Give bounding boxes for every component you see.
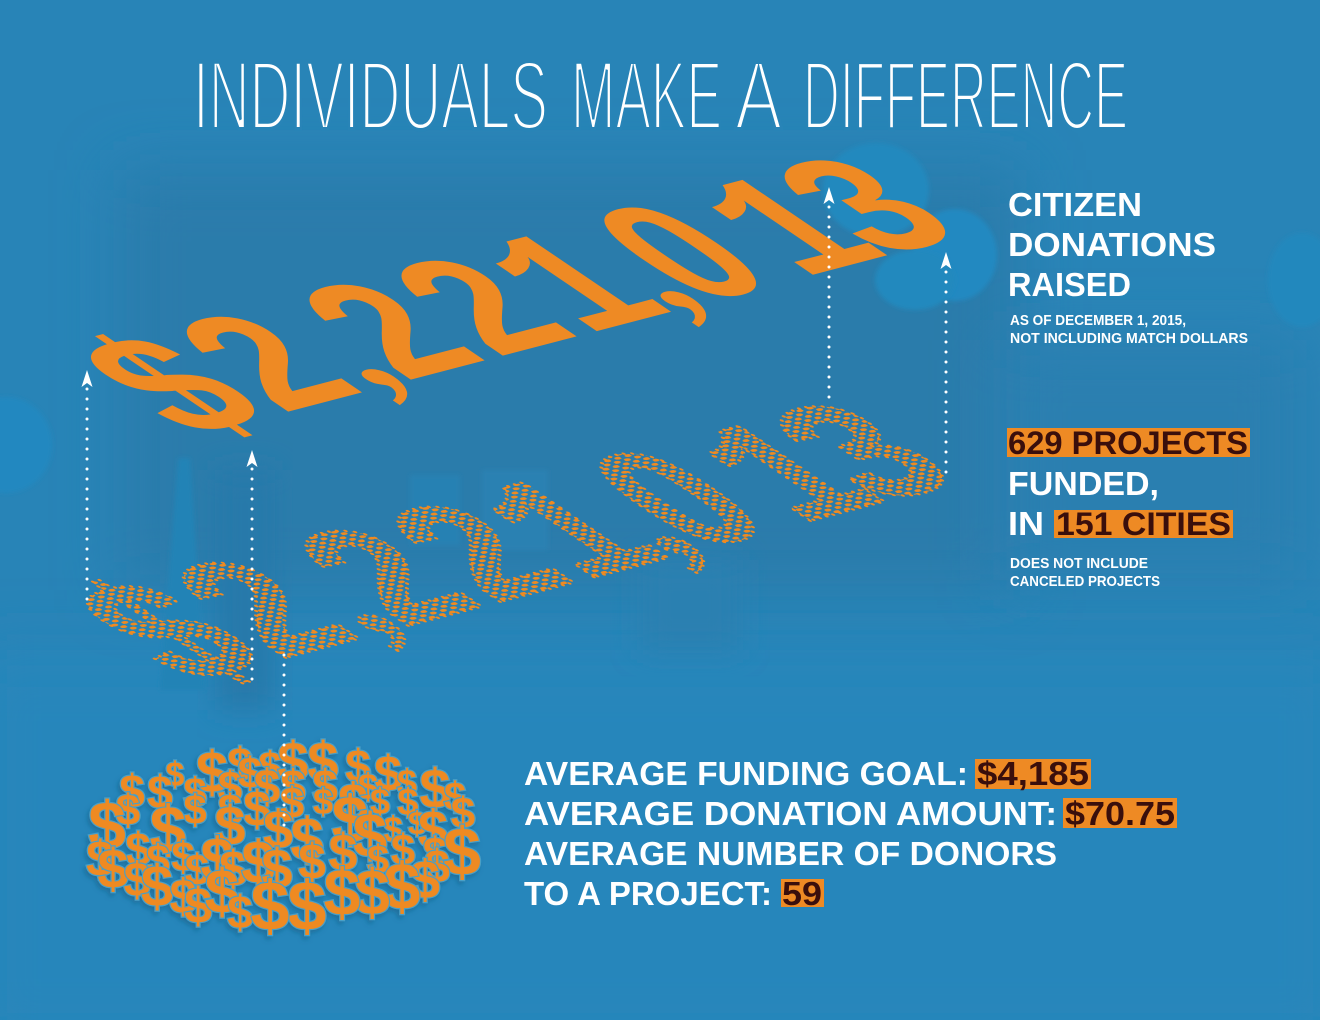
pile of dollar signs: $ <box>170 871 197 924</box>
pile of dollar signs: $ <box>443 814 481 890</box>
text block: averages: TO A PROJECT: <box>524 875 772 912</box>
text block: averages: AVERAGE NUMBER OF DONORS <box>524 835 1057 872</box>
pile of dollar signs: $ <box>183 786 207 833</box>
pile of dollar signs: $ <box>312 760 338 812</box>
pile of dollar signs: $ <box>116 786 140 835</box>
dotted amount: $2,221,013 made of small marks: $2 <box>32 533 423 721</box>
pile of dollar signs: $ <box>358 766 378 807</box>
pile of dollar signs: $ <box>338 773 368 833</box>
pile of dollar signs: $ <box>290 806 324 873</box>
pile of dollar signs: $ <box>258 743 282 790</box>
pile of dollar signs: $ <box>218 763 242 812</box>
pile of dollar signs: $ <box>423 829 447 878</box>
text block: averages: $4,185 <box>977 755 1089 792</box>
text block: averages: AVERAGE DONATION AMOUNT: <box>524 795 1057 832</box>
pile of dollar signs: $ <box>444 775 466 819</box>
pile of dollar signs: $ <box>243 781 271 837</box>
text block: averages: AVERAGE FUNDING GOAL: <box>524 755 968 792</box>
large amount: $2,221,013: , <box>236 287 441 412</box>
text block: citizen donations raised: AS OF DECEMBER 1, 2015, <box>1010 313 1186 329</box>
large amount: $2,221,013: , <box>535 209 740 334</box>
pile of dollar signs: $ <box>332 782 368 856</box>
pile of dollar signs: $ <box>227 738 253 790</box>
pile of dollar signs: $ <box>307 730 339 793</box>
pile of dollar signs: $ <box>397 782 419 824</box>
pile of dollar signs: $ <box>119 765 145 817</box>
title: A <box>735 41 782 150</box>
pile of dollar signs: $ <box>238 749 262 798</box>
pile of dollar signs: $ <box>125 823 151 875</box>
text block: projects funded: IN <box>1008 505 1044 542</box>
text block: citizen donations raised: RAISED <box>1008 266 1131 303</box>
pile of dollar signs: $ <box>353 802 387 871</box>
large amount: $2,221,013: 221 <box>249 207 733 419</box>
pile of dollar signs: $ <box>451 789 475 838</box>
title <box>193 41 1128 150</box>
pile of dollar signs: $ <box>254 761 281 814</box>
pile of dollar signs: $ <box>214 794 246 857</box>
pile of dollar signs: $ <box>345 740 371 792</box>
pile of dollar signs: $ <box>419 757 451 820</box>
pile of dollar signs: $ <box>184 878 212 934</box>
text block: citizen donations raised: NOT INCLUDING MATCH DOLLARS <box>1010 331 1248 347</box>
text block: citizen donations raised: DONATIONS <box>1008 226 1216 263</box>
pile of dollar signs: $ <box>200 826 234 893</box>
pile of dollar signs: $ <box>141 854 173 919</box>
pile of dollar signs: $ <box>418 800 448 860</box>
dotted amount: $2,221,013 made of small marks: 13 <box>646 376 1023 561</box>
pile of dollar signs: $ <box>124 854 151 907</box>
pile of dollar signs: $ <box>171 833 195 880</box>
large amount: $2,221,013 <box>26 125 1026 475</box>
pile of dollar signs: $ <box>277 730 309 793</box>
arrow: left edge of the dollar sign <box>82 370 92 600</box>
pile of dollar signs: $ <box>298 834 326 890</box>
dotted amount: $2,221,013 made of small marks <box>23 371 1023 721</box>
pile of dollar signs: $ <box>241 829 275 896</box>
pile of dollar signs: $ <box>397 762 417 803</box>
pile of dollar signs: $ <box>196 740 228 805</box>
pile of dollar signs: $ <box>391 826 415 875</box>
pile of dollar signs: $ <box>280 760 306 812</box>
pile of dollar signs: $ <box>251 867 289 945</box>
pile of dollar signs <box>86 730 481 945</box>
text block: projects funded: DOES NOT INCLUDE <box>1010 556 1148 572</box>
pile of dollar signs: $ <box>185 846 209 895</box>
pile of dollar signs: $ <box>146 836 170 883</box>
text block: projects funded: CANCELED PROJECTS <box>1010 574 1160 590</box>
pile of dollar signs: $ <box>384 849 420 923</box>
title: MAKE <box>571 41 722 150</box>
pile of dollar signs: $ <box>329 824 358 882</box>
large amount: $2,221,013: 0 <box>540 173 821 330</box>
pile of dollar signs: $ <box>263 800 293 860</box>
pile of dollar signs: $ <box>324 855 360 929</box>
dotted connector from pile to dotted amount <box>282 655 286 835</box>
pile of dollar signs: $ <box>410 850 440 910</box>
pile of dollar signs: $ <box>219 841 247 897</box>
text block: citizen donations raised <box>1008 186 1248 347</box>
pile of dollar signs: $ <box>370 781 390 822</box>
dotted amount: $2,221,013 made of small marks: , <box>233 533 438 658</box>
pile of dollar signs: $ <box>288 867 326 945</box>
arrow: right edge of the dollar sign <box>246 450 258 682</box>
pile of dollar signs: $ <box>261 837 293 900</box>
pile of dollar signs: $ <box>383 809 403 850</box>
pile of dollar signs: $ <box>408 805 426 841</box>
text block: projects funded: 151 CITIES <box>1056 506 1231 542</box>
dotted amount: $2,221,013 made of small marks: 0 <box>537 419 818 576</box>
pile of dollar signs: $ <box>88 788 126 864</box>
pile of dollar signs: $ <box>86 831 114 887</box>
pile of dollar signs: $ <box>227 886 253 938</box>
pile of dollar signs: $ <box>183 769 207 816</box>
pile of dollar signs: $ <box>367 838 389 882</box>
pile of dollar signs: $ <box>150 792 186 866</box>
arrow: left edge of the final digit <box>824 187 834 405</box>
text block: citizen donations raised: CITIZEN <box>1008 186 1142 223</box>
text block: averages: 59 <box>782 875 822 912</box>
pile of dollar signs: $ <box>205 858 239 927</box>
text block: projects funded: 629 PROJECTS <box>1008 425 1248 461</box>
pile of dollar signs: $ <box>354 856 390 928</box>
pile of dollar signs: $ <box>280 779 304 828</box>
text block: averages <box>524 755 1177 912</box>
pile of dollar signs: $ <box>97 837 129 900</box>
pile of dollar signs: $ <box>313 781 333 822</box>
large amount: $2,221,013: 13 <box>649 130 1026 315</box>
dotted amount: $2,221,013 made of small marks: 221 <box>246 453 730 665</box>
text block: projects funded <box>1007 425 1250 590</box>
pile of dollar signs: $ <box>166 756 185 794</box>
title: INDIVIDUALS <box>193 41 548 150</box>
pile of dollar signs: $ <box>424 840 450 892</box>
arrow: right edge of the final digit <box>940 252 952 482</box>
pile of dollar signs: $ <box>147 766 173 818</box>
text block: averages: $70.75 <box>1065 795 1175 832</box>
pile of dollar signs: $ <box>374 746 402 802</box>
pile of dollar signs: $ <box>218 786 242 835</box>
text block: projects funded: FUNDED, <box>1008 465 1159 502</box>
dotted amount: $2,221,013 made of small marks: , <box>532 455 737 580</box>
large amount: $2,221,013: $2 <box>35 287 426 475</box>
